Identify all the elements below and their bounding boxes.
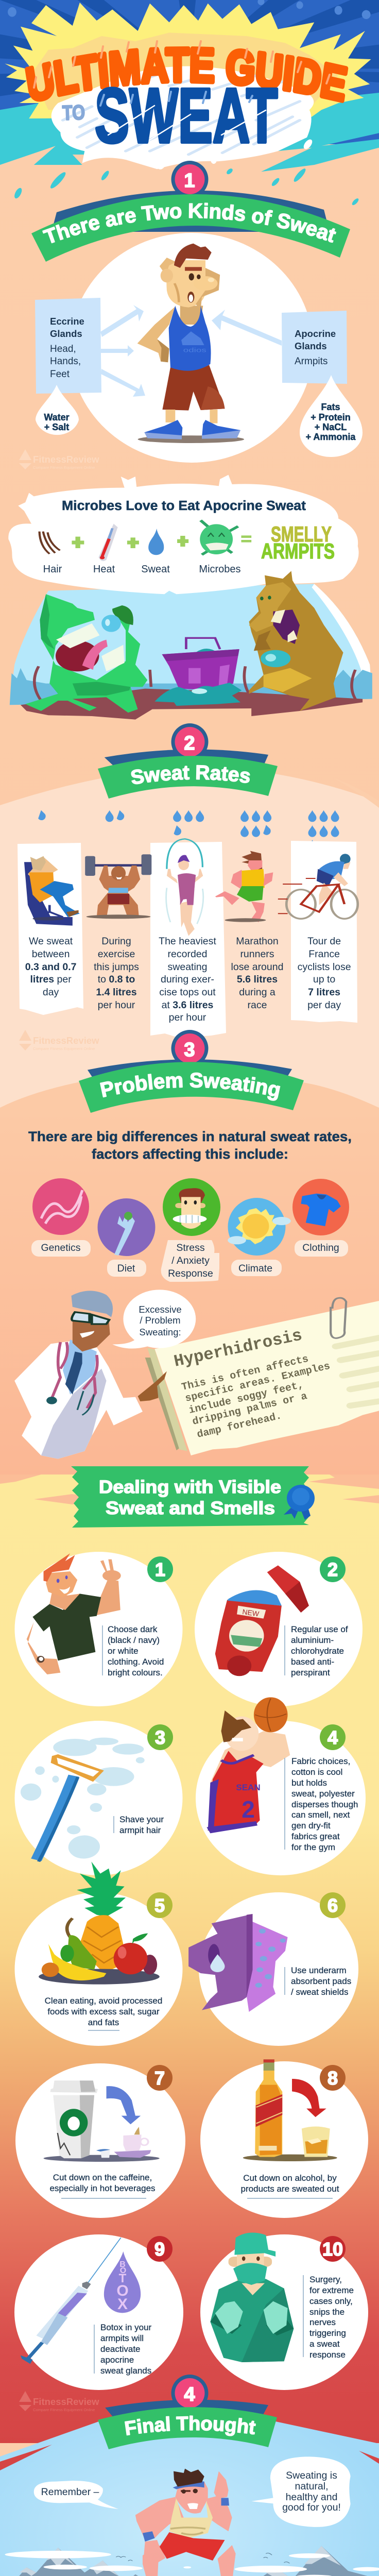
drop: fats protein nacl ammonia: Fats bbox=[321, 402, 340, 412]
tip 4: fabrics: can smell, next bbox=[291, 1810, 350, 1820]
logo: fitness review (top): Compare Fitness Equipment Online bbox=[33, 465, 95, 470]
factor: clothing: Clothing bbox=[302, 1242, 339, 1253]
icon: woman skipping rope bbox=[166, 839, 203, 936]
paper: hyperhidrosis: dripping palms or a bbox=[191, 1391, 308, 1428]
title highlights bbox=[34, 41, 330, 140]
tip 1: clothing colours: clothing. Avoid bbox=[108, 1657, 164, 1667]
stat text: marathon runners: lose around bbox=[231, 961, 283, 973]
tip 4: fabrics: Fabric choices, bbox=[291, 1756, 350, 1766]
laundry basket bbox=[186, 638, 220, 649]
badge bbox=[147, 1724, 173, 1750]
badge: 5 bbox=[154, 1895, 165, 1916]
stat text: we sweat: 0.3 and 0.7 bbox=[25, 961, 76, 973]
title: ultimate guide: ULTIMATE GUIDE bbox=[25, 46, 348, 103]
doctor with speech bubble and hyperhidrosis paper bbox=[14, 1290, 379, 1459]
tip 1: clothing colours bbox=[14, 1552, 182, 1706]
factor: diet: Diet bbox=[117, 1263, 135, 1274]
tip 10: surgery bbox=[200, 2233, 368, 2390]
paper: hyperhidrosis: damp forehead. bbox=[196, 1410, 283, 1441]
equation labels: Hair bbox=[43, 564, 62, 575]
tip 1: clothing colours: Choose dark bbox=[108, 1624, 158, 1634]
green banner bbox=[79, 1062, 304, 1113]
paper: hyperhidrosis: include soggy feet, bbox=[187, 1379, 305, 1417]
factor: genetics: Genetics bbox=[41, 1242, 81, 1253]
badge bbox=[147, 2065, 173, 2091]
stat text: we sweat: litres per bbox=[30, 974, 72, 985]
badge bbox=[147, 2236, 173, 2262]
stat text: heaviest recorded: The heaviest bbox=[159, 936, 216, 947]
tip 4: fabrics: cotton is cool bbox=[291, 1767, 342, 1777]
stat text: marathon runners: 5.6 litres bbox=[237, 974, 278, 985]
factor: diet bbox=[98, 1198, 156, 1277]
logo: fitness review (bottom): Compare Fitness Equipment Online bbox=[33, 2408, 95, 2412]
tip 5: clean eating bbox=[14, 1861, 182, 2046]
dealing with visible sweat ribbon: Dealing with Visible bbox=[99, 1477, 281, 1497]
man in blue vest: odios bbox=[183, 347, 206, 353]
factor: climate: Climate bbox=[238, 1263, 272, 1274]
speech bubble: sweating is natural: healthy and bbox=[286, 2492, 337, 2503]
green banner bbox=[31, 194, 350, 262]
eccrine box: Head, bbox=[50, 344, 76, 354]
logo: fitness review (top): FitnessReview bbox=[33, 454, 99, 465]
badge: 8 bbox=[328, 2067, 338, 2089]
paper: hyperhidrosis bbox=[145, 1298, 379, 1455]
navy arc bbox=[51, 191, 330, 232]
badge: 10 bbox=[322, 2239, 343, 2260]
stat text: during exercise: exercise bbox=[98, 948, 135, 960]
stat text: tour de france: per day bbox=[307, 999, 341, 1011]
icon: paper clip bbox=[331, 1298, 346, 1338]
banner text: Sweat Rates bbox=[131, 765, 250, 784]
speech bubble: excessive problem sweating bbox=[112, 1290, 196, 1348]
white splash droplets bbox=[155, 138, 314, 171]
icon: man on office chair bbox=[24, 856, 80, 926]
drop lettering: O bbox=[116, 2282, 129, 2299]
white speech cloud bbox=[8, 475, 359, 594]
badge bbox=[147, 1556, 173, 1582]
doctor bbox=[14, 1291, 167, 1459]
yellow explosion burst bbox=[5, 3, 371, 118]
drop: fats protein nacl ammonia: + NaCL bbox=[315, 422, 347, 432]
heading: big differences: There are big differences in natural sweat rates, bbox=[28, 1129, 352, 1144]
brown monster bbox=[249, 571, 343, 711]
tip 1: clothing colours: (black / navy) bbox=[108, 1635, 160, 1645]
banner text: Problem Sweating bbox=[100, 1073, 280, 1101]
tip 7: caffeine: especially in hot beverages bbox=[49, 2183, 156, 2193]
badge bbox=[320, 2065, 346, 2091]
tip 9: botox: apocrine bbox=[100, 2355, 134, 2365]
stat text: heaviest recorded: recorded bbox=[168, 948, 207, 960]
tip 5: clean eating: foods with excess salt, sugar bbox=[47, 2007, 160, 2016]
drop: fats protein nacl ammonia bbox=[300, 375, 363, 457]
tip 9: botox: sweat glands bbox=[100, 2366, 151, 2376]
banner text: There are Two Kinds of Sweat bbox=[42, 202, 337, 243]
white strips behind stats bbox=[18, 841, 357, 1037]
icon: weightlifter bbox=[85, 854, 151, 919]
white cloud bbox=[51, 66, 314, 169]
green banner bbox=[98, 756, 278, 799]
heading: big differences: factors affecting this include: bbox=[92, 1146, 288, 1162]
speech bubble: sweating is natural: good for you! bbox=[282, 2502, 341, 2513]
stat text: tour de france: Tour de bbox=[307, 936, 341, 947]
factor: stress: Response bbox=[168, 1268, 213, 1279]
icon: sweat drop bbox=[148, 529, 164, 555]
eccrine box: Eccrine bbox=[50, 316, 84, 327]
paper: hyperhidrosis: Hyperhidrosis bbox=[172, 1326, 304, 1371]
tip 3: shave: Shave your bbox=[119, 1815, 164, 1824]
speech bubble: sweating is natural: Sweating is bbox=[286, 2470, 337, 2481]
tip 10: surgery: a sweat bbox=[309, 2339, 340, 2349]
section 2 header: badge and banner bbox=[98, 723, 278, 799]
badge bbox=[320, 1724, 346, 1750]
equation icons bbox=[40, 520, 251, 561]
tip 4: fabrics: sweat, polyester bbox=[291, 1789, 355, 1799]
logo: fitness review (bottom): FitnessReview bbox=[33, 2396, 99, 2407]
panel: two kinds of sweat bbox=[35, 233, 363, 463]
man in red shorts bbox=[122, 2469, 256, 2576]
jersey lettering bbox=[236, 1783, 261, 1823]
tip 10: surgery: snips the bbox=[309, 2307, 344, 2317]
badge: 2 bbox=[328, 1559, 338, 1580]
drop: water and salt: + Salt bbox=[44, 422, 69, 432]
tip 6: underarm pads: Use underarm bbox=[291, 1965, 347, 1975]
badge: 9 bbox=[154, 2239, 165, 2260]
badge: 3 bbox=[155, 1727, 165, 1748]
tip 8: alcohol: products are sweated out bbox=[241, 2184, 339, 2194]
tip 1: clothing colours: or white bbox=[108, 1646, 139, 1656]
tip 2: antiperspirant: NEW bbox=[242, 1607, 260, 1618]
factor: stress bbox=[161, 1178, 220, 1282]
jersey lettering: SEAN bbox=[236, 1783, 261, 1792]
tip 10: surgery: response bbox=[309, 2350, 346, 2360]
stat text: heaviest recorded: during exer- bbox=[161, 974, 214, 985]
apocrine box: Glands bbox=[295, 341, 327, 351]
tip 4: fabrics: but holds bbox=[291, 1778, 327, 1788]
icon: cyclist bbox=[278, 854, 358, 919]
stat text: tour de france: up to bbox=[313, 974, 335, 985]
factor: genetics bbox=[31, 1178, 91, 1257]
tip 2: antiperspirant: chlorohydrate bbox=[291, 1646, 344, 1656]
smelly armpits: ARMPITS bbox=[261, 539, 335, 563]
section 4 header: badge and banner bbox=[98, 2375, 277, 2449]
drop: water and salt bbox=[36, 385, 79, 435]
tip 4: fabrics bbox=[196, 1697, 366, 1875]
apocrine box: Armpits bbox=[295, 356, 328, 367]
sky and landscape bbox=[0, 2406, 379, 2576]
speech bubble: excessive problem sweating: Sweating: bbox=[139, 1327, 181, 1337]
mountains bbox=[0, 2546, 379, 2576]
tip 2: antiperspirant: perspirant bbox=[291, 1668, 330, 1677]
logo: fitness review (middle) bbox=[19, 1030, 99, 1051]
drop lettering: T bbox=[119, 2272, 127, 2285]
logo: fitness review (middle): Compare Fitness Equipment Online bbox=[33, 1046, 95, 1051]
tip 9: botox: deactivate bbox=[100, 2344, 140, 2354]
stat text: marathon runners: during a bbox=[239, 987, 275, 998]
apocrine box bbox=[282, 311, 347, 384]
icon: hair bbox=[40, 532, 60, 554]
equation labels: Heat bbox=[93, 564, 115, 575]
tip 4: fabrics: fabrics great bbox=[291, 1832, 340, 1841]
tip 2: antiperspirant bbox=[195, 1552, 363, 1706]
heading: big differences bbox=[28, 1129, 352, 1162]
tip 7: caffeine: Cut down on the caffeine, bbox=[53, 2173, 152, 2182]
stat text: during exercise: 1.4 litres bbox=[96, 987, 137, 998]
badge bbox=[147, 1892, 173, 1918]
drop lettering: X bbox=[117, 2296, 128, 2313]
dealing with visible sweat ribbon: Sweat and Smells bbox=[106, 1498, 275, 1518]
stat text: marathon runners: race bbox=[248, 999, 267, 1011]
logo: fitness review (top) bbox=[19, 449, 99, 470]
heading: Microbes Love to Eat Apocrine Sweat bbox=[62, 499, 306, 513]
tip 1: clothing colours: bright colours. bbox=[108, 1668, 163, 1677]
tip 6: underarm pads bbox=[188, 1892, 358, 2046]
tip 4: fabrics: gen dry-fit bbox=[291, 1821, 331, 1831]
drop: fats protein nacl ammonia: + Ammonia bbox=[306, 432, 356, 442]
tip 10: surgery: for extreme bbox=[309, 2285, 354, 2295]
tip 10: surgery: nerves bbox=[309, 2317, 336, 2327]
tip 10: surgery: cases only, bbox=[309, 2296, 353, 2306]
speech bubble: sweating is natural: natural, bbox=[295, 2481, 329, 2492]
monster scene background bbox=[8, 475, 372, 720]
dealing with visible sweat ribbon bbox=[71, 1466, 315, 1528]
speech bubble: sweating is natural bbox=[251, 2456, 351, 2527]
stat text: during exercise: per hour bbox=[98, 999, 135, 1011]
tip 10: surgery: triggering bbox=[309, 2328, 346, 2338]
drop lettering: O bbox=[120, 2266, 126, 2275]
white blob behind man bbox=[70, 233, 313, 463]
stat text: heaviest recorded: cise tops out bbox=[159, 987, 216, 998]
eccrine box: Feet bbox=[50, 369, 70, 380]
teal splash band bbox=[0, 93, 379, 172]
eccrine box: Hands, bbox=[50, 356, 81, 367]
speech bubble: remember bbox=[34, 2481, 118, 2509]
green banner bbox=[98, 2407, 277, 2449]
icon: plus bbox=[72, 536, 188, 548]
tip 4: fabrics: for the gym bbox=[291, 1842, 335, 1852]
badge: 6 bbox=[328, 1895, 338, 1916]
section badge 2 bbox=[171, 723, 208, 760]
banner text: Final Thought bbox=[125, 2415, 256, 2436]
speech bubble: excessive problem sweating: / Problem bbox=[140, 1315, 181, 1326]
factor: climate bbox=[228, 1198, 291, 1276]
tip 2: antiperspirant: aluminium- bbox=[291, 1635, 334, 1645]
title: sweat: SWEAT bbox=[95, 73, 278, 159]
stat text: marathon runners: Marathon bbox=[236, 936, 279, 947]
tip 10: surgery: Surgery, bbox=[309, 2275, 342, 2284]
badge bbox=[320, 2236, 346, 2262]
section badge 2: 2 bbox=[184, 733, 195, 754]
factor: clothing bbox=[292, 1179, 349, 1257]
stat text: we sweat: between bbox=[32, 948, 70, 960]
smelly armpits: SMELLY bbox=[271, 522, 332, 546]
tip 3: shave bbox=[14, 1721, 182, 1875]
badge: 1 bbox=[155, 1559, 165, 1580]
drop: water and salt: Water bbox=[44, 412, 70, 422]
section badge 4: 4 bbox=[184, 2384, 195, 2405]
equation labels bbox=[43, 564, 241, 575]
section 3 header: badge and banner bbox=[79, 1030, 304, 1113]
badge: 7 bbox=[154, 2067, 165, 2089]
tip 5: clean eating: and fats bbox=[88, 2018, 119, 2027]
tip 3: shave: armpit hair bbox=[119, 1825, 161, 1835]
stat text: heaviest recorded: per hour bbox=[169, 1012, 206, 1023]
stat text: tour de france: 7 litres bbox=[308, 987, 340, 998]
eccrine box bbox=[35, 298, 101, 394]
teal droplets bbox=[13, 167, 360, 206]
stat text: heaviest recorded: at 3.6 litres bbox=[162, 999, 213, 1011]
stat text: during exercise: to 0.8 to bbox=[98, 974, 135, 985]
eccrine box: Glands bbox=[50, 328, 82, 339]
stat text: during exercise: During bbox=[101, 936, 131, 947]
green monster bbox=[25, 594, 147, 713]
stat text: we sweat: We sweat bbox=[29, 936, 73, 947]
section 1 header: badge and banner bbox=[31, 161, 350, 262]
section badge 1: 1 bbox=[184, 170, 195, 192]
equation labels: Microbes bbox=[199, 564, 241, 575]
drop lettering bbox=[116, 2260, 129, 2313]
stat text: tour de france: cyclists lose bbox=[298, 961, 351, 973]
icon: rosette bbox=[284, 1485, 315, 1520]
stat text: we sweat: day bbox=[43, 987, 59, 998]
factor: stress: / Anxiety bbox=[171, 1255, 210, 1266]
paper: hyperhidrosis: specific areas. Examples bbox=[184, 1361, 331, 1405]
badge bbox=[320, 1556, 346, 1582]
tip 9: botox: armpits will bbox=[100, 2333, 144, 2343]
section badge 3: 3 bbox=[184, 1039, 195, 1061]
stat text: marathon runners: runners bbox=[240, 948, 274, 960]
stat text: tour de france: France bbox=[308, 948, 340, 960]
stat text: during exercise: this jumps bbox=[94, 961, 139, 973]
tip 9: botox: Botox in your bbox=[100, 2323, 152, 2332]
icon: microbe bbox=[200, 520, 238, 555]
tip 8: alcohol bbox=[200, 2059, 368, 2218]
jersey lettering: 2 bbox=[242, 1796, 255, 1823]
badge bbox=[320, 1892, 346, 1918]
speech bubble: remember: Remember – bbox=[41, 2486, 99, 2498]
equation labels: Sweat bbox=[141, 564, 170, 575]
tip 7: caffeine bbox=[15, 2063, 185, 2218]
logo: fitness review (middle): FitnessReview bbox=[33, 1035, 99, 1046]
section badge 3 bbox=[171, 1030, 208, 1067]
sweat rate illustrations bbox=[24, 839, 358, 936]
badge: 4 bbox=[328, 1727, 338, 1748]
tip 6: underarm pads: absorbent pads bbox=[291, 1976, 351, 1986]
section badge 1 bbox=[171, 161, 208, 198]
tip 5: clean eating: Clean eating, avoid processed bbox=[45, 1996, 162, 2006]
apocrine box: Apocrine bbox=[295, 328, 336, 339]
section badge 4 bbox=[171, 2375, 208, 2412]
man in blue vest bbox=[137, 244, 244, 443]
tip 4: fabrics: disperses though bbox=[291, 1800, 358, 1809]
tip 2: antiperspirant: Regular use of bbox=[291, 1624, 348, 1634]
speech bubble: excessive problem sweating: Excessive bbox=[139, 1304, 182, 1315]
tip 8: alcohol: Cut down on alcohol, by bbox=[243, 2173, 337, 2183]
tip 2: antiperspirant: based anti- bbox=[291, 1657, 334, 1667]
factor: stress: Stress bbox=[176, 1242, 205, 1253]
panel: microbes love to eat apocrine sweat bbox=[8, 475, 372, 720]
smelly armpits bbox=[261, 522, 335, 563]
header: blue sky with rays bbox=[0, 0, 379, 206]
tip 9: botox bbox=[14, 2234, 183, 2390]
icon: equals bbox=[241, 535, 251, 543]
title: the word to: TO bbox=[62, 100, 85, 125]
panel: sweat rates drops bbox=[38, 810, 339, 852]
arrows bbox=[100, 305, 282, 397]
drop lettering: B bbox=[119, 2260, 126, 2269]
paper: hyperhidrosis: This is often affects bbox=[180, 1353, 309, 1394]
icon: marathon runner bbox=[215, 851, 273, 922]
drop: fats protein nacl ammonia: + Protein bbox=[311, 412, 351, 422]
tip 6: underarm pads: / sweat shields bbox=[291, 1987, 348, 1997]
logo: fitness review (bottom) bbox=[19, 2391, 99, 2412]
stat text: heaviest recorded: sweating bbox=[168, 961, 207, 973]
icon: thermometer bbox=[99, 524, 118, 561]
